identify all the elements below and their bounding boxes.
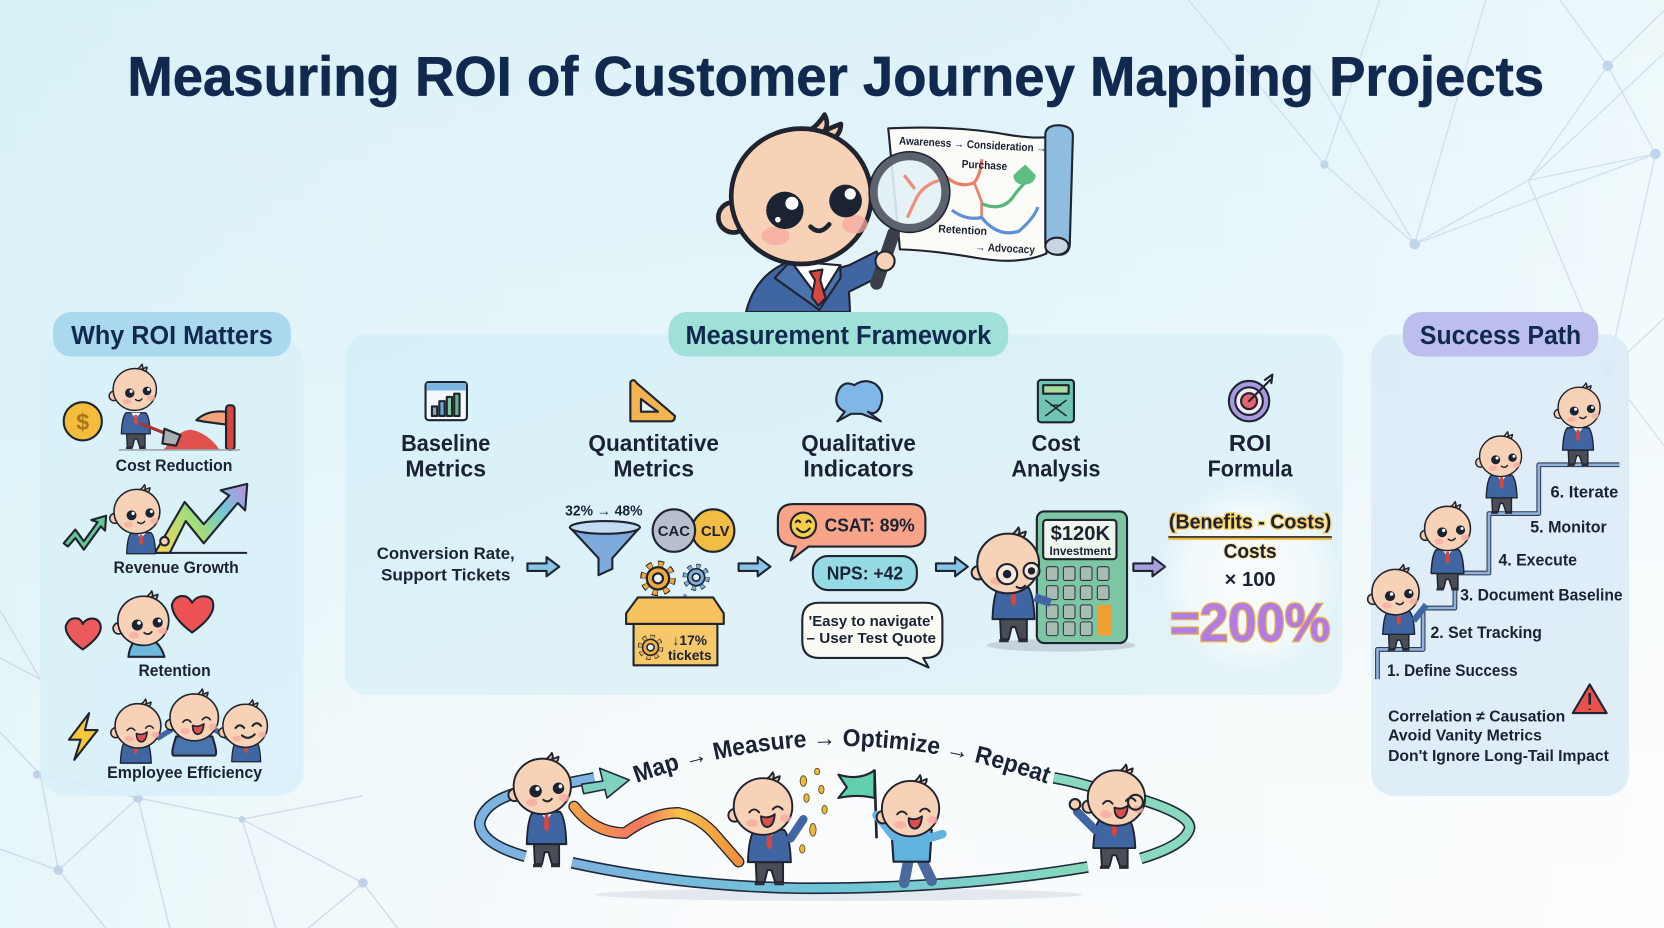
step labels: 3. Document Baseline bbox=[1460, 587, 1623, 605]
column: ROI formula bbox=[1160, 375, 1340, 676]
icon: ruler triangle bbox=[630, 380, 675, 421]
column: baseline metrics: Metrics bbox=[405, 455, 486, 481]
icon: bar chart window bbox=[426, 382, 467, 420]
icon: speech bubbles bbox=[836, 381, 882, 421]
calculator: $120K bbox=[1051, 523, 1110, 545]
title: Measuring ROI of Customer Journey Mapping Projects bbox=[127, 46, 1544, 108]
central mascot with magnifier and journey map bbox=[718, 115, 1073, 312]
step labels: 6. Iterate bbox=[1550, 484, 1618, 502]
coins CAC and CLV bbox=[653, 509, 734, 552]
formula bbox=[1168, 511, 1332, 653]
item: retention bbox=[66, 591, 213, 680]
loop label bbox=[637, 746, 1045, 783]
heading: success path bbox=[1403, 312, 1598, 357]
step labels: 1. Define Success bbox=[1387, 662, 1518, 680]
pitfalls text: Don't Ignore Long-Tail Impact bbox=[1388, 748, 1609, 765]
stairs highlight bbox=[1377, 465, 1619, 679]
gears and ticket box: ↓17% bbox=[673, 633, 707, 648]
column: cost analysis: Cost bbox=[1032, 430, 1081, 456]
network decoration bottom left bbox=[0, 610, 398, 928]
calculator bbox=[987, 511, 1136, 652]
stairs bbox=[1377, 465, 1619, 679]
bubble: user quote: 'Easy to navigate' bbox=[809, 614, 934, 630]
funnel bbox=[570, 521, 640, 575]
mascot with flag bbox=[838, 769, 942, 883]
formula: =200% bbox=[1170, 593, 1330, 653]
formula: (Benefits - Costs) bbox=[1169, 511, 1331, 533]
panel: success path bbox=[1368, 312, 1629, 796]
column: qualitative indicators: Qualitative bbox=[801, 430, 916, 456]
mascot with glasses waving bbox=[1070, 765, 1145, 869]
column: qualitative indicators: Indicators bbox=[803, 455, 914, 481]
loop: map measure optimize repeat bbox=[474, 729, 1196, 901]
heading: why ROI matters bbox=[53, 312, 291, 357]
pitfalls text: Avoid Vanity Metrics bbox=[1388, 728, 1542, 745]
item: cost reduction: Cost Reduction bbox=[116, 457, 232, 475]
journey map scroll: → Advocacy bbox=[975, 241, 1036, 257]
item: revenue growth bbox=[64, 484, 247, 577]
loop text: Map → Measure → Optimize → Repeat bbox=[632, 729, 1051, 784]
item: cost reduction bbox=[64, 364, 240, 475]
column: ROI formula: Formula bbox=[1208, 455, 1293, 481]
column: quantitative metrics: 32% → 48% bbox=[565, 504, 643, 520]
item: employee efficiency bbox=[69, 689, 267, 782]
gears and ticket box bbox=[626, 565, 724, 665]
column: quantitative metrics bbox=[565, 380, 734, 665]
icon: warning triangle bbox=[1573, 684, 1607, 713]
step labels bbox=[1387, 484, 1623, 680]
journey map scroll: Awareness → Consideration → bbox=[899, 135, 1047, 155]
climbing mascots bbox=[1368, 383, 1600, 651]
bubble: user quote: – User Test Quote bbox=[807, 631, 936, 647]
journey map scroll: Purchase bbox=[961, 159, 1008, 173]
item: retention: Retention bbox=[138, 662, 211, 680]
item: employee efficiency: Employee Efficiency bbox=[107, 764, 263, 782]
bubble: NPS bbox=[813, 556, 917, 590]
formula: × 100 bbox=[1225, 569, 1276, 591]
arrow bbox=[936, 557, 968, 576]
item: revenue growth: Revenue Growth bbox=[114, 559, 239, 577]
bubble: NPS: NPS: +42 bbox=[827, 563, 903, 583]
magnifying glass bbox=[869, 152, 950, 283]
column: cost analysis bbox=[972, 380, 1136, 652]
formula: Costs bbox=[1224, 541, 1277, 563]
column: baseline metrics: Baseline bbox=[401, 430, 490, 456]
step labels: 2. Set Tracking bbox=[1431, 624, 1542, 642]
coins CAC and CLV: CAC bbox=[658, 524, 690, 540]
loop track bbox=[480, 768, 1190, 901]
heading: why ROI matters: Why ROI Matters bbox=[71, 322, 273, 350]
panel: why ROI matters bbox=[40, 312, 304, 796]
column: qualitative indicators bbox=[778, 381, 942, 667]
icon: small calculator bbox=[1038, 380, 1074, 422]
bubble: CSAT bbox=[778, 504, 925, 560]
mascot head bbox=[718, 115, 871, 264]
panel: measurement framework bbox=[345, 312, 1342, 695]
pitfalls text: Correlation ≠ Causation bbox=[1388, 709, 1565, 726]
column: ROI formula: ROI bbox=[1229, 430, 1271, 456]
arrow bbox=[739, 557, 770, 576]
arrow bbox=[527, 557, 559, 576]
coins CAC and CLV: CLV bbox=[701, 524, 730, 540]
gears and ticket box: tickets bbox=[668, 648, 712, 663]
step labels: 5. Monitor bbox=[1530, 519, 1607, 537]
column: baseline metrics: Conversion Rate, bbox=[377, 544, 515, 563]
item: cost reduction: $ bbox=[76, 409, 89, 435]
heading: success path: Success Path bbox=[1420, 322, 1581, 350]
heading: measurement framework: Measurement Framework bbox=[686, 322, 992, 350]
step labels: 4. Execute bbox=[1498, 552, 1577, 570]
journey map scroll bbox=[888, 125, 1073, 261]
column: baseline metrics bbox=[377, 382, 515, 584]
pitfalls text bbox=[1388, 709, 1609, 765]
mascot mapping with ribbon bbox=[508, 753, 739, 867]
bubble: user quote bbox=[802, 603, 942, 667]
network decoration top right bbox=[1189, 0, 1664, 446]
column: cost analysis: Analysis bbox=[1011, 455, 1100, 481]
column: baseline metrics: Support Tickets bbox=[381, 565, 510, 584]
mascot body bbox=[746, 251, 885, 312]
bubble: CSAT: CSAT: 89% bbox=[825, 516, 915, 536]
mascot with glasses bbox=[972, 527, 1051, 642]
arrow bbox=[1133, 557, 1165, 576]
heading: measurement framework bbox=[669, 312, 1008, 357]
calculator: Investment bbox=[1050, 545, 1111, 558]
journey map scroll: Retention bbox=[938, 223, 988, 238]
column: quantitative metrics: Metrics bbox=[613, 455, 694, 481]
column: quantitative metrics: Quantitative bbox=[588, 430, 719, 456]
icon: target bbox=[1229, 375, 1272, 421]
mascot celebrating with confetti bbox=[728, 768, 827, 885]
